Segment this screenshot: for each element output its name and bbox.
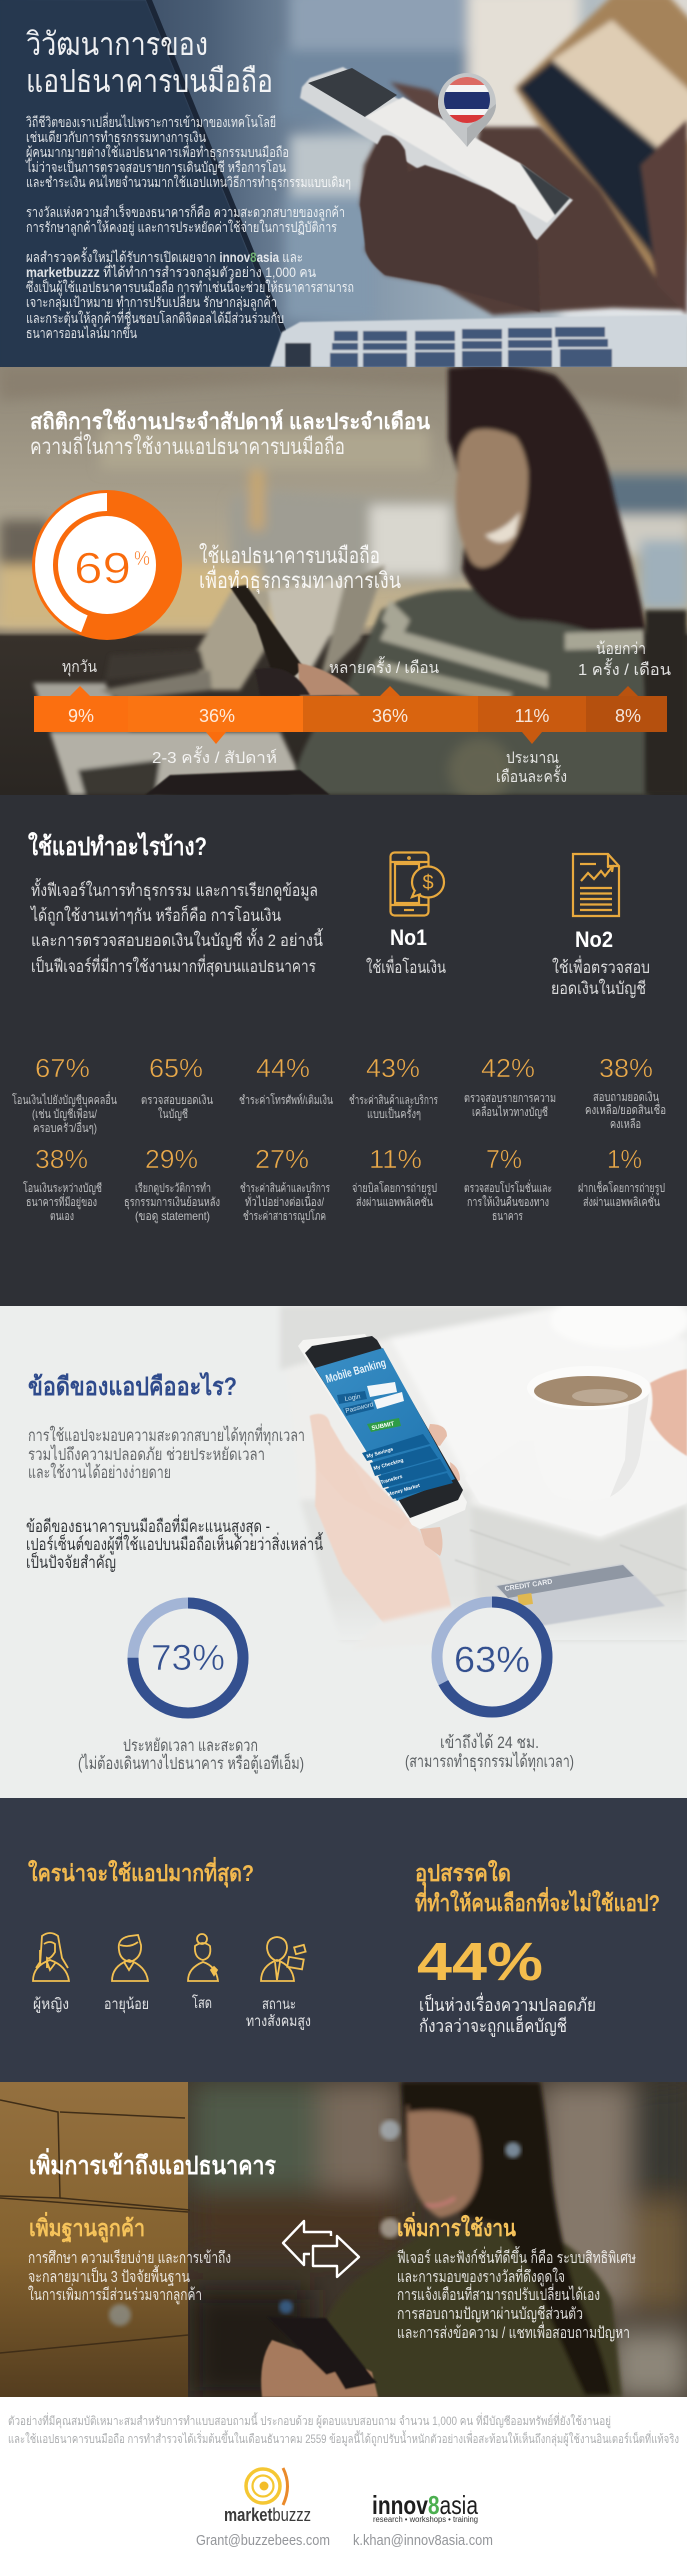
title: แอปธนาคารบนมือถือ [26,63,273,99]
stats grid: labels row 2: ตนเอง [50,1209,74,1223]
photo: phone with mobile banking and coffee [280,1306,687,1641]
stats grid: percentages row 2: 1% [607,1144,642,1174]
text block: introduction: การรักษาลูกค้าให้คงอยู่ และการประหยัดค่าใช้จ่ายในการปฏิบัติการ [26,219,337,236]
stats grid: percentages row 2: 11% [369,1144,422,1174]
phone [298,1334,467,1529]
stats grid: labels row 2: ทั่วไปอย่างต่อเนื่อง/ [245,1193,325,1209]
laptop keyboard [270,315,687,367]
panel: who uses and barriers [0,1798,687,2082]
credit card [495,1564,665,1626]
text block: 69% caption: ใช้แอปธนาคารบนมือถือ [199,543,380,568]
text block: No2 [551,927,650,998]
heading: ใช้แอปทำอะไรบ้าง? [28,831,207,861]
text block: No2: ยอดเงินในบัญชี [551,978,646,998]
chart: frequency bar: 36% [372,706,408,726]
stats grid: labels row 1: (เช่น บัญชีเพื่อน/ [32,1105,98,1121]
text block: features explanation: เป็นฟีเจอร์ที่มีการใช้งานมากที่สุดบนแอปธนาคาร [31,954,316,977]
stats grid: percentages row 1 [35,1053,653,1083]
title: วิวัฒนาการของ [26,26,208,62]
caption: 63% [405,1732,574,1772]
stats grid: labels row 2: ชำระค่าสาธารณูปโภค [243,1209,326,1224]
text block: top-rated benefits: เป็นปัจจัยสำคัญ [26,1551,116,1572]
text block: customer base: จะกลายมาเป็น 3 ปัจจัยพื้นฐาน [28,2265,190,2286]
icon: phone with dollar bubble [390,852,444,916]
text block: customer base: ในการเพิ่มการมีส่วนร่วมจากลูกค้า [28,2283,202,2305]
subheading: increase usage: เพิ่มการใช้งาน [397,2211,516,2241]
text block: security concern: เป็นห่วงเรื่องความปลอดภัย [419,1992,596,2015]
text block: introduction: ธนาคารออนไลน์มากขึ้น [26,323,137,341]
stats grid: percentages row 2: 27% [255,1144,309,1174]
saucer [465,1440,687,1536]
photo: phone with mobile banking and coffee: Transfers [380,1474,403,1486]
caption: 73%: ประหยัดเวลา และสะดวก [123,1736,258,1755]
text block: convenience [28,1423,305,1482]
icon: woman [33,1933,69,1981]
photo: phone with mobile banking and coffee: Money Market [387,1483,421,1498]
stats grid: labels row 1: ในบัญชี [158,1107,188,1121]
photo: phone with mobile banking and coffee: My Checking [373,1458,404,1472]
caption: 73%: (ไม่ต้องเดินทางไปธนาคาร หรือตู้เอทีเอ็ม) [78,1752,304,1774]
labels: frequency categories: น้อยกว่า [596,640,646,658]
text block: top-rated benefits: ข้อดีของธนาคารบนมือถือที่มีคะแนนสูงสุด - [26,1514,270,1537]
text block: security concern [419,1992,596,2037]
sleeve [382,1605,452,1626]
chart: 69% donut [32,490,182,640]
text block: No1: ใช้เพื่อโอนเงิน [366,955,446,977]
stats grid: labels row 1: สอบถามยอดเงิน [593,1090,659,1104]
labels: frequency categories: 1 ครั้ง / เดือน [578,658,671,679]
text block: usage: การสอบถามปัญหาผ่านบัญชีส่วนตัว [397,2305,583,2323]
text block: convenience: การใช้แอปจะมอบความสะดวกสบายได้ทุกที่ทุกเวลา [28,1423,305,1446]
hand on tablet [298,663,360,696]
text block: No2: No2 [575,927,613,952]
stats grid: percentages row 2: 38% [35,1144,88,1174]
heading: ข้อดีของแอปคืออะไร? [28,1371,237,1401]
labels: demographics: ผู้หญิง [33,1996,69,2013]
thumb over phone [310,1414,410,1530]
text block: introduction: และกระตุ้นให้ลูกค้าที่ชื่นชอบโลกดิจิตอลได้มีส่วนร่วมกับ [26,309,284,327]
chart: 73% ring [133,1603,243,1713]
chart: frequency bar [34,686,667,744]
text block: introduction: รางวัลแห่งความสำเร็จของธนาคารก็คือ ความสะดวกสบายของลูกค้า [26,203,345,221]
stats grid: labels row 1: คงเหลือ/ยอดสินเชื่อ [585,1101,666,1117]
text block: No1 [366,925,446,977]
text block: usage: การแจ้งเตือนที่สามารถปรับเปลี่ยนได้เอง [397,2283,600,2304]
tablet [229,584,302,677]
text block: introduction: ไม่ว่าจะเป็นการตรวจสอบรายการเดินบัญชี หรือการโอน [25,158,286,175]
logo: marketbuzzz [224,2468,311,2525]
photo: phone with mobile banking and coffee: SUBMIT [371,1421,395,1432]
stats grid: labels row 2: ชำระค่าสินค้าและบริการ [240,1181,330,1195]
title [26,26,273,99]
hand [360,82,687,315]
text block: No2: ใช้เพื่อตรวจสอบ [552,955,650,977]
chart: 63% ring [437,1602,547,1712]
caption: 63%: เข้าถึงได้ 24 ชม. [440,1732,539,1752]
stats grid: labels row 2: เรียกดูประวัติการทำ [135,1181,211,1196]
text block: 69% caption: เพื่อทำธุรกรรมทางการเงิน [199,565,401,594]
chairs [33,565,385,795]
text block: introduction: ผู้คนมากมายต่างใช้แอปธนาคารเพื่อทำธุรกรรมบนมือถือ [26,143,289,161]
text block: introduction: เจาะกลุ่มเป้าหมาย ทำการปรับเปลี่ยน รักษากลุ่มลูกค้า [26,293,277,311]
text block: usage [397,2246,636,2342]
logo: innov8asia: research • workshops • training [373,2515,478,2524]
panel: hero section [0,0,687,367]
photo: phone with mobile banking and coffee: My Savings [366,1447,394,1460]
stats grid: labels row 1: ตรวจสอบรายการความ [464,1091,556,1105]
heading: barriers [415,1859,660,1916]
text block: introduction: marketbuzzz ที่ได้ทำการสำรวจกลุ่มตัวอย่าง 1,000 คน [26,263,316,281]
icon: two-way arrows [283,2221,359,2277]
heading: barriers: อุปสรรคใด [415,1859,511,1888]
credit card [515,0,687,300]
stats grid: labels row 2: จ่ายบิลโดยการถ่ายรูป [352,1181,437,1196]
stats grid: percentages row 1: 44% [256,1053,310,1083]
text block: introduction: เช่นเดียวกับการทำธุรกรรมทางการเงิน [26,129,206,146]
stats grid: labels row 1: แบบเป็นครั้งๆ [367,1105,421,1121]
stats grid: percentages row 2: 7% [486,1144,522,1174]
heading: who uses the app most: ใครน่าจะใช้แอปมากที่สุด? [28,1856,254,1888]
chart: frequency bar: 8% [615,706,641,726]
text block: contact emails [196,2532,493,2549]
photo: woman with tablet at airport [0,365,687,802]
text block: No1: No1 [390,925,427,950]
stats grid: labels row 1: ตรวจสอบยอดเงิน [141,1093,213,1107]
stats grid: percentages row 1: 67% [35,1053,90,1083]
coffee cup [527,1366,687,1501]
labels: frequency categories [62,640,671,786]
stats grid: labels row 2: ธนาคาร [492,1209,523,1223]
labels: demographics: ทางสังคมสูง [246,2013,311,2030]
stats grid: labels row 2: ตรวจสอบโปรโมชั่นและ [464,1179,552,1195]
text block: introduction [25,113,354,341]
chart: frequency bar: 11% [515,706,549,726]
text block: introduction: และชำระเงิน คนไทยจำนวนมากใช้แอปแทนวิธีการทำธุรกรรมแบบเดิมๆ [26,174,351,191]
logo: marketbuzzz: marketbuzzz [224,2505,311,2525]
text block: top-rated benefits [26,1514,323,1572]
text block: features explanation: และการตรวจสอบยอดเงินในบัญชี ทั้ง 2 อย่างนี้ [31,928,323,950]
chart: 69% donut: 69 [74,544,131,593]
stats grid: labels row 2: โอนเงินระหว่างบัญชี [23,1181,102,1195]
text block: usage: และการมอบของรางวัลที่ดึงดูดใจ [397,2265,565,2287]
labels: frequency categories: หลายครั้ง / เดือน [329,656,439,677]
text block: top-rated benefits: เปอร์เซ็นต์ของผู้ที่ใช้แอปบนมือถือเห็นด้วยว่าสิ่งเหล่านี้ [26,1532,323,1555]
stats grid: labels row 2: ธนาคารที่มีอยู่ของ [26,1193,97,1210]
text block: contact emails: Grant@buzzebees.com [196,2532,330,2549]
text block: methodology note [8,2412,679,2447]
labels: demographics: โสด [192,1994,212,2012]
text block: features explanation: ได้ถูกใช้งานเท่าๆกัน หรือก็คือ การโอนเงิน [29,904,281,926]
stats grid: labels row 1 [12,1090,666,1135]
panel: benefits of the app [0,1292,687,1798]
icon: single person with heart [188,1934,218,1981]
icon: Thailand map pin [438,73,496,147]
heading: สถิติการใช้งานประจำสัปดาห์ และประจำเดือน [30,408,430,434]
stats grid: labels row 2: การให้เงินคืนของทาง [467,1195,549,1209]
labels: frequency categories: 2-3 ครั้ง / สัปดาห์ [152,746,277,767]
panel: weekly and monthly usage statistics [0,365,687,802]
chart: 63% ring: 63% [454,1639,530,1680]
stats grid: percentages row 2 [35,1144,642,1174]
caption: 63%: (สามารถทำธุรกรรมได้ทุกเวลา) [405,1751,574,1772]
labels: demographics [33,1994,311,2030]
subheading: increase customer base: เพิ่มฐานลูกค้า [29,2211,145,2243]
hand [310,1414,452,1625]
photo: phone with mobile banking and coffee: Login [344,1393,361,1403]
woman [290,365,650,795]
stats grid: percentages row 1: 65% [149,1053,203,1083]
credit card: CREDIT CARD [504,1579,553,1593]
heading: เพิ่มการเข้าถึงแอปธนาคาร [29,2148,276,2180]
text block: introduction: วิถีชีวิตของเราเปลี่ยนไปเพราะการเข้ามาของเทคโนโลยี [26,113,276,130]
text block: introduction: ผลสำรวจครั้งใหม่ได้รับการเปิดเผยจาก innov8asia และ [26,247,303,265]
stats grid: labels row 1: โอนเงินไปยังบัญชีบุคคลอื่น [12,1091,117,1108]
chart: 73% ring: 73% [151,1637,225,1678]
labels: demographics: อายุน้อย [104,1996,149,2014]
jeans [145,770,330,795]
text block: introduction: ซึ่งเป็นผู้ใช้แอปธนาคารบนมือถือ การทำเช่นนี้จะช่วยให้ธนาคารสามารถ [26,277,354,296]
chart: frequency bar: 9% [68,706,94,726]
labels: frequency categories: ทุกวัน [62,659,97,677]
stats grid: labels row 2 [23,1179,665,1224]
text block: convenience: และใช้งานได้อย่างง่ายดาย [28,1462,171,1482]
icon: young man [112,1935,148,1981]
stats grid: percentages row 1: 42% [481,1053,535,1083]
text block: customer base: การศึกษา ความเรียบง่าย และการเข้าถึง [28,2249,231,2267]
photo: hand holding phone over laptop [0,0,687,367]
text block: convenience: รวมไปถึงความปลอดภัย ช่วยประหยัดเวลา [28,1444,265,1464]
photo: woman with phone in cafe [0,2082,687,2400]
text block: customer base [28,2249,231,2305]
stats grid: labels row 1: คงเหลือ [610,1117,641,1131]
text block: features explanation: ทั้งฟีเจอร์ในการทำธุรกรรม และการเรียกดูข้อมูล [31,878,318,901]
chart: 69% donut: % [134,548,150,570]
caption: 73% [78,1736,304,1774]
stats grid: labels row 1: ชำระค่าโทรศัพท์/เติมเงิน [239,1093,333,1107]
fingers over phone [360,135,540,312]
labels: frequency categories: ประมาณ [506,750,559,767]
heading: ความถี่ในการใช้งานแอปธนาคารบนมือถือ [30,431,345,459]
photo: phone with mobile banking and coffee: Mobile Banking [325,1357,387,1386]
logo: innov8asia: innov8asia [372,2490,478,2520]
text block: contact emails: k.khan@innov8asia.com [353,2532,493,2549]
heading [30,408,430,459]
stats grid: labels row 1: ชำระค่าสินค้าและบริการ [349,1093,438,1107]
icon: high social status person with money [261,1937,306,1981]
icon: phone with dollar bubble: $ [422,872,434,894]
icon: statement document [573,854,619,916]
stats grid: labels row 2: ธุรกรรมการเงินย้อนหลัง [124,1195,220,1210]
stats grid: percentages row 1: 43% [366,1053,420,1083]
stats grid: labels row 1: ครอบครัว/อื่นๆ) [33,1119,97,1135]
panel: what the app is used for [0,795,687,1306]
stats grid: labels row 2: ส่งผ่านแอพพลิเคชั่น [583,1193,660,1209]
labels: demographics: สถานะ [262,1996,296,2013]
stats grid: percentages row 2: 29% [145,1144,198,1174]
stats grid: labels row 2: (ขอดู statement) [135,1209,210,1224]
stats grid: percentages row 1: 38% [599,1053,653,1083]
panel: increasing access to banking apps [0,2082,687,2400]
panel: footer [8,2412,679,2549]
stats grid: labels row 2: ส่งผ่านแอพพลิเคชั่น [356,1193,433,1209]
photo: phone with mobile banking and coffee: Password [345,1401,375,1415]
stats grid: labels row 1: เคลื่อนไหวทางบัญชี [472,1103,548,1119]
text block: 69% caption [199,543,401,594]
chart: frequency bar: 36% [199,706,235,726]
text block: security concern: กังวลว่าจะถูกแฮ็คบัญชี [419,2014,567,2037]
text block: features explanation [29,878,323,977]
stat: 44%: 44% [417,1932,543,1992]
labels: frequency categories: เดือนละครั้ง [496,765,567,786]
